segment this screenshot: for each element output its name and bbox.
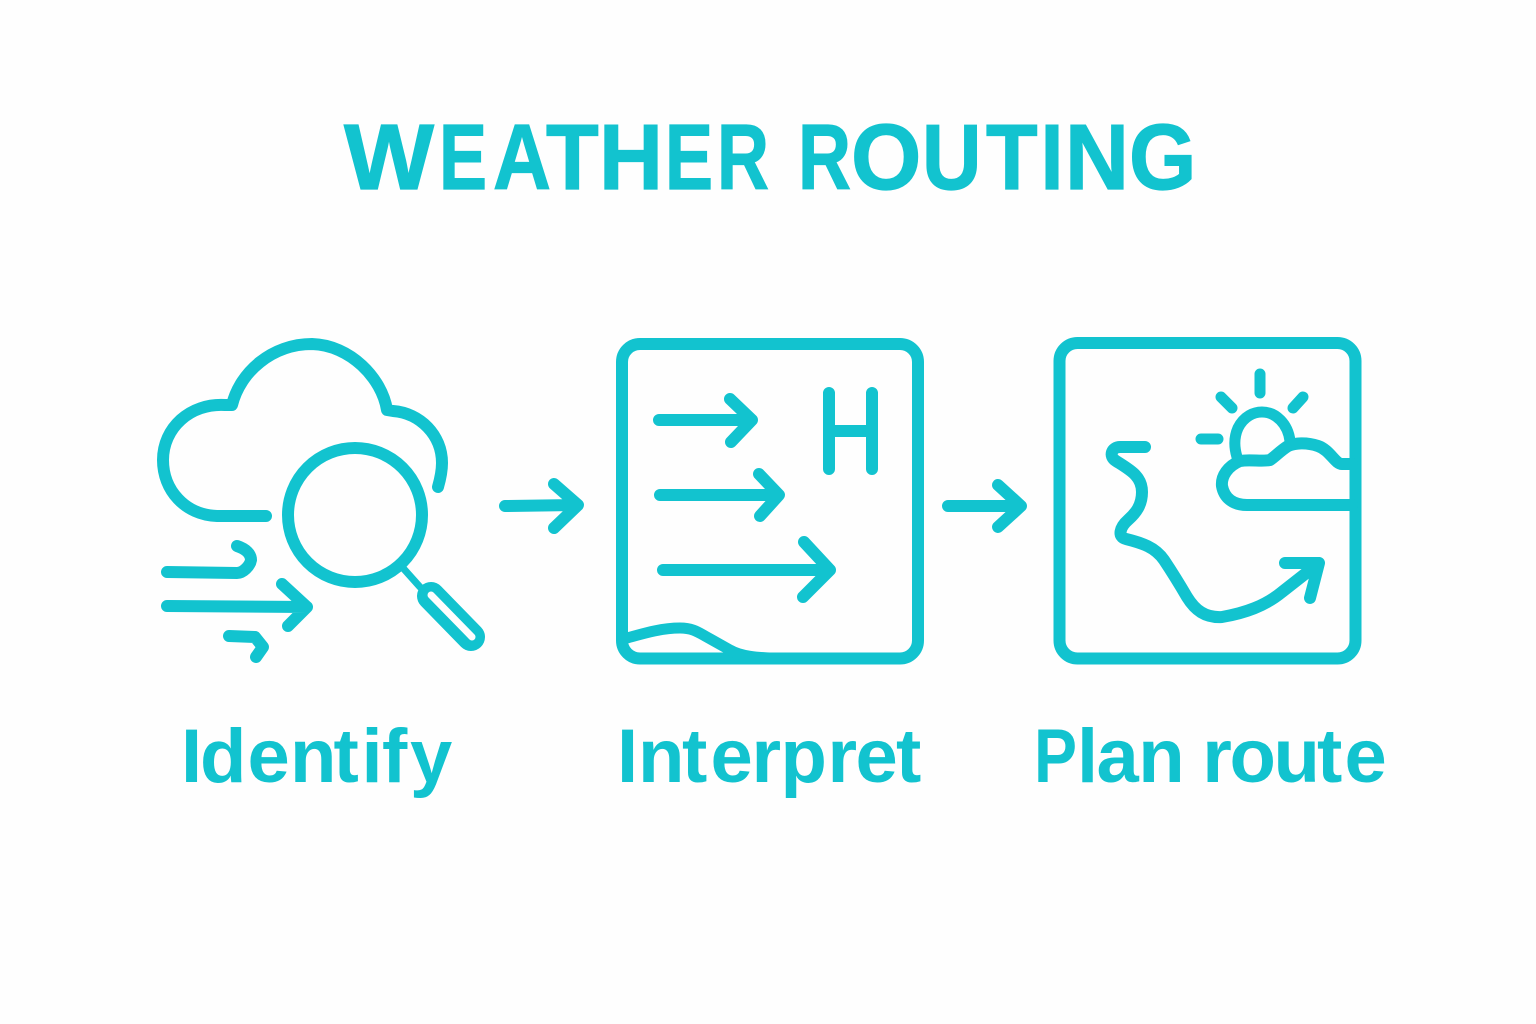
title: N bbox=[1065, 105, 1129, 209]
map fold bbox=[627, 628, 785, 658]
title: T bbox=[986, 105, 1038, 209]
panel: plan route map bbox=[1060, 343, 1356, 658]
arrow: identify to interpret bbox=[505, 484, 578, 528]
title: I bbox=[1040, 105, 1064, 209]
magnifier lens bbox=[288, 448, 422, 582]
arrow: interpret to plan route bbox=[948, 485, 1021, 527]
label: identify: Identify bbox=[181, 714, 452, 799]
label: plan route: route bbox=[1202, 714, 1387, 799]
title: E bbox=[439, 105, 487, 209]
wind lines bbox=[167, 546, 307, 657]
icon: identify cloud with magnifier and wind bbox=[163, 344, 472, 657]
title: O bbox=[851, 105, 921, 209]
cloud bbox=[1222, 443, 1352, 505]
title: T bbox=[546, 105, 599, 209]
title: R bbox=[717, 105, 769, 209]
high pressure H bbox=[829, 393, 872, 469]
magnifier handle bbox=[403, 568, 472, 637]
label: plan route: P bbox=[1034, 714, 1077, 799]
route path with arrow bbox=[1112, 447, 1319, 617]
cloud outline bbox=[163, 344, 442, 516]
panel: interpret map bbox=[622, 344, 918, 658]
label: plan route: lan bbox=[1077, 714, 1185, 799]
title: U bbox=[922, 105, 982, 209]
title: A bbox=[493, 105, 551, 209]
title: E bbox=[665, 105, 713, 209]
title: W bbox=[344, 105, 434, 209]
wind arrows bbox=[659, 399, 830, 597]
title: H bbox=[599, 105, 663, 209]
label: interpret: Interpret bbox=[617, 714, 921, 799]
map frame bbox=[622, 344, 918, 658]
route frame bbox=[1060, 343, 1356, 658]
title: G bbox=[1129, 105, 1196, 209]
sun bbox=[1201, 374, 1303, 457]
title: R bbox=[798, 105, 851, 209]
